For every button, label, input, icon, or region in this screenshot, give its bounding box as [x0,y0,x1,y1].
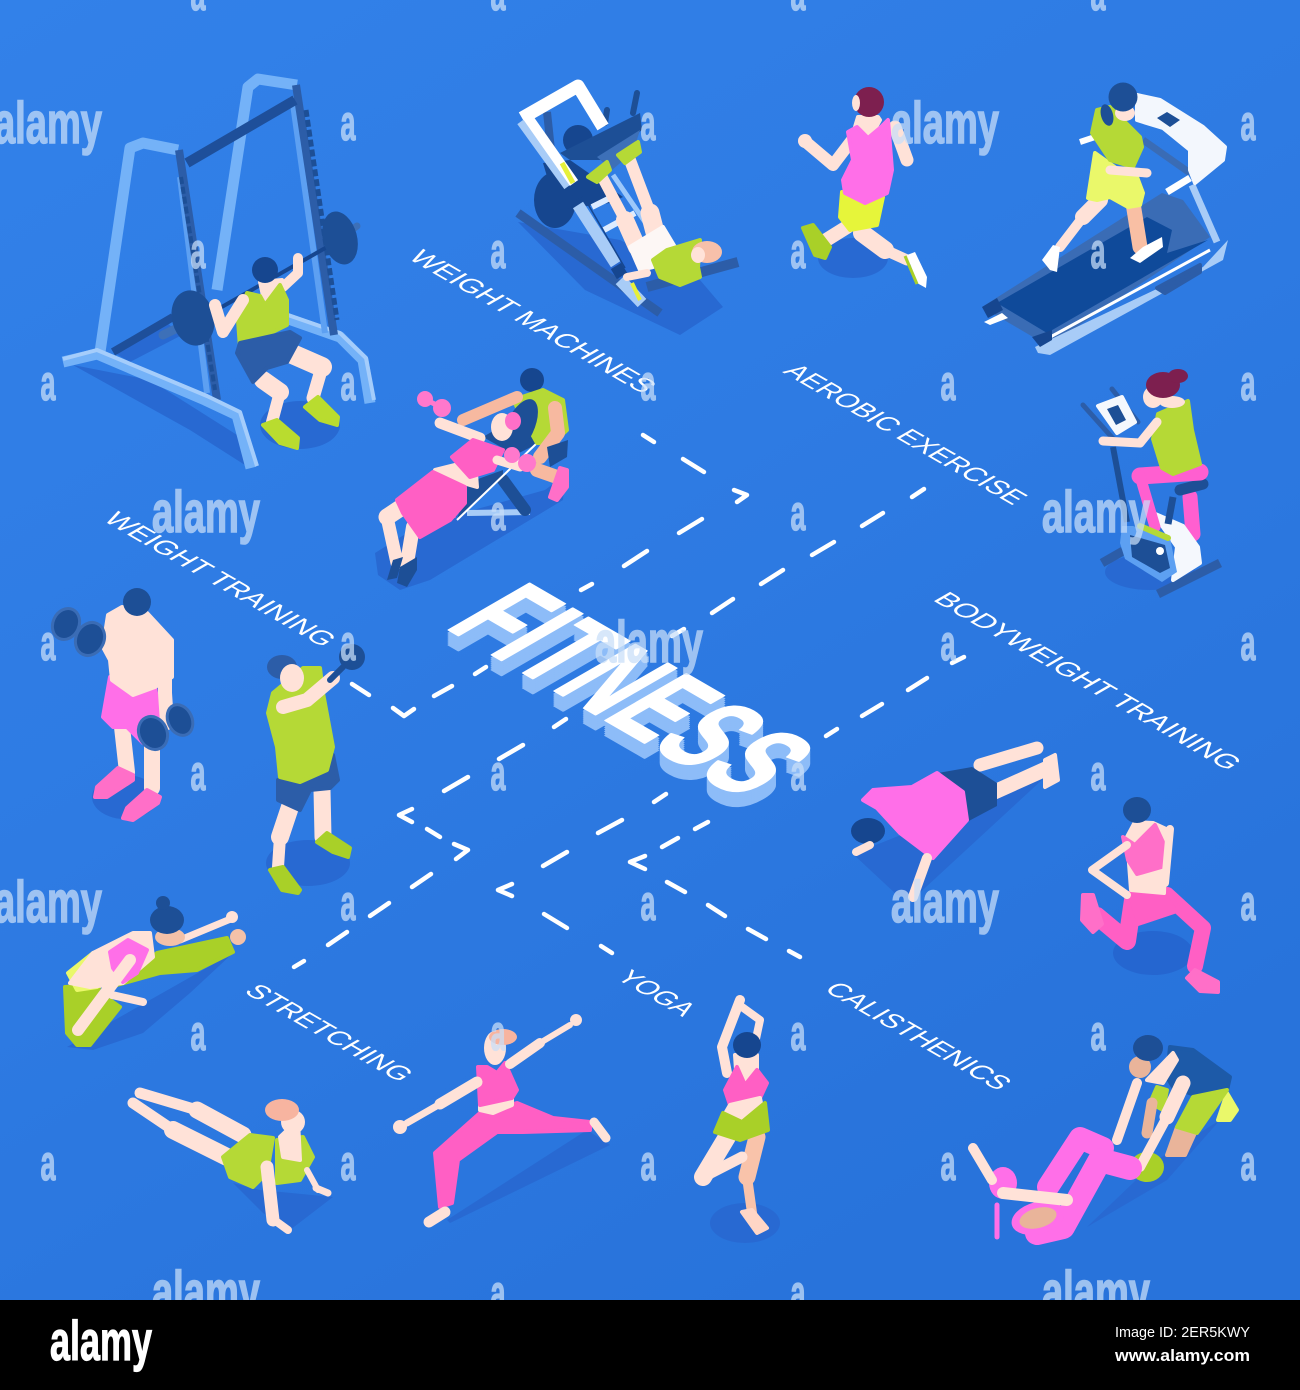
label: weight machines: WEIGHT MACHINES [402,246,663,397]
central title FITNESS: FITNESS [419,579,848,827]
rider [1140,472,1200,476]
website: www.alamy.com [1114,1346,1250,1365]
illustration: treadmill [982,82,1228,355]
trainer [520,368,544,392]
ladder rungs [592,175,647,230]
image id: Image ID: 2ER5KWY [1115,1324,1250,1341]
watermark pattern: a [1240,615,1256,671]
central title FITNESS: FITNESS [419,566,848,814]
watermark pattern: a [340,1135,356,1191]
illustration: leg press machine [518,86,738,335]
white frame [522,86,642,303]
watermark pattern: a [1090,223,1106,279]
watermark pattern: a [1240,1135,1256,1191]
watermark pattern: a [640,355,656,411]
label: bodyweight training: BODYWEIGHT TRAINING [927,588,1249,774]
console and post [1192,185,1217,242]
label: yoga: YOGA [610,966,703,1020]
footer bar [0,1300,1300,1390]
connector: weight training branch [352,667,486,716]
watermark pattern: a [790,1265,806,1321]
watermark pattern: a [490,745,506,801]
watermark pattern: alamy [891,91,999,156]
treadmill deck [982,193,1210,347]
watermark pattern: a [790,1005,806,1061]
watermark pattern: a [1240,95,1256,151]
watermark pattern: a [640,875,656,931]
watermark pattern: a [190,745,206,801]
watermark pattern: a [340,355,356,411]
watermark pattern: a [790,223,806,279]
illustration: man lifting kettlebell [266,644,365,893]
footer logo: alamy [50,1309,152,1372]
label: calisthenics: CALISTHENICS [818,978,1019,1094]
illustration: warrior yoga pose [393,1014,610,1223]
connector: stretching branch [294,719,566,967]
connector: yoga branch [498,794,666,953]
illustration: push-up [851,748,1058,899]
watermark pattern: a [1090,745,1106,801]
watermark pattern: a [640,95,656,151]
central title FITNESS: FITNESS [419,577,848,825]
watermark pattern: a [940,1135,956,1191]
runner on treadmill [1083,200,1100,217]
illustration: bench dumbbell press with trainer [375,368,568,590]
watermark pattern: a [490,223,506,279]
watermark pattern: a [940,615,956,671]
watermark pattern: a [1090,1005,1106,1061]
central title FITNESS: FITNESS [419,571,848,819]
central title FITNESS: FITNESS [419,573,848,821]
illustration: seated forward bend [65,896,246,1050]
watermark pattern: alamy [891,870,999,935]
watermark pattern: a [340,95,356,151]
bench [483,415,540,455]
watermark pattern: a [40,355,56,411]
watermark pattern: a [490,1005,506,1061]
machine shadow [73,365,245,465]
shadow [375,475,565,590]
connector: calisthenics branch [630,822,800,957]
connector: bodyweight training branch [826,657,964,736]
illustration: squat in smith machine [63,79,374,468]
illustration: exercise bike [1083,369,1220,594]
watermark pattern: a [490,485,506,541]
watermark pattern: a [190,1005,206,1061]
smith machine frame [63,79,374,468]
illustration: running woman [798,87,927,288]
category labels [97,246,1249,1094]
woman [495,394,545,460]
dumbbells [417,391,536,472]
illustration: dumbbell curl man [47,588,198,820]
watermark pattern: alamy [152,480,260,545]
bike screen [1098,397,1135,433]
label: stretching: STRETCHING [238,980,421,1086]
watermark pattern: alamy [1042,480,1150,545]
watermark pattern: a [40,1135,56,1191]
barbell [220,247,327,308]
dumbbells [47,604,198,754]
watermark pattern: a [490,1265,506,1321]
central title FITNESS: FITNESS [419,569,848,817]
illustration: partner sit-ups [973,1035,1237,1240]
athlete lying [600,173,625,220]
central title FITNESS: FITNESS [419,575,848,823]
central title FITNESS: FITNESS [419,581,848,829]
machine base [518,213,660,313]
watermark pattern: a [790,745,806,801]
person doing sit-up [1048,1138,1103,1187]
watermark pattern: a [940,355,956,411]
illustration: tree yoga pose [703,1000,780,1243]
central title FITNESS [419,566,848,829]
label: weight training: WEIGHT TRAINING [97,508,344,651]
illustration: lunge [1082,797,1218,992]
shadow [518,222,723,335]
illustration: cobra pose [133,1093,333,1230]
watermark pattern: a [340,615,356,671]
kettlebell [339,644,365,670]
connector: aerobic exercise branch [672,489,924,636]
watermark pattern: a [1240,875,1256,931]
watermark pattern: alamy [1042,1260,1150,1325]
athlete [283,258,298,287]
watermark pattern: a [640,1135,656,1191]
watermark pattern: a [790,485,806,541]
watermark pattern: alamy [152,1260,260,1325]
watermark pattern: a [340,875,356,931]
connector: weight machines branch [581,435,747,590]
partner kneeling [1218,1093,1237,1120]
bike frame [1102,551,1123,563]
watermark pattern: a [190,223,206,279]
flowchart dashed connectors [294,435,964,967]
label: aerobic exercise: AEROBIC EXERCISE [777,360,1034,509]
watermark pattern: alamy [595,610,703,675]
watermark pattern: a [40,615,56,671]
watermark pattern: a [1240,355,1256,411]
